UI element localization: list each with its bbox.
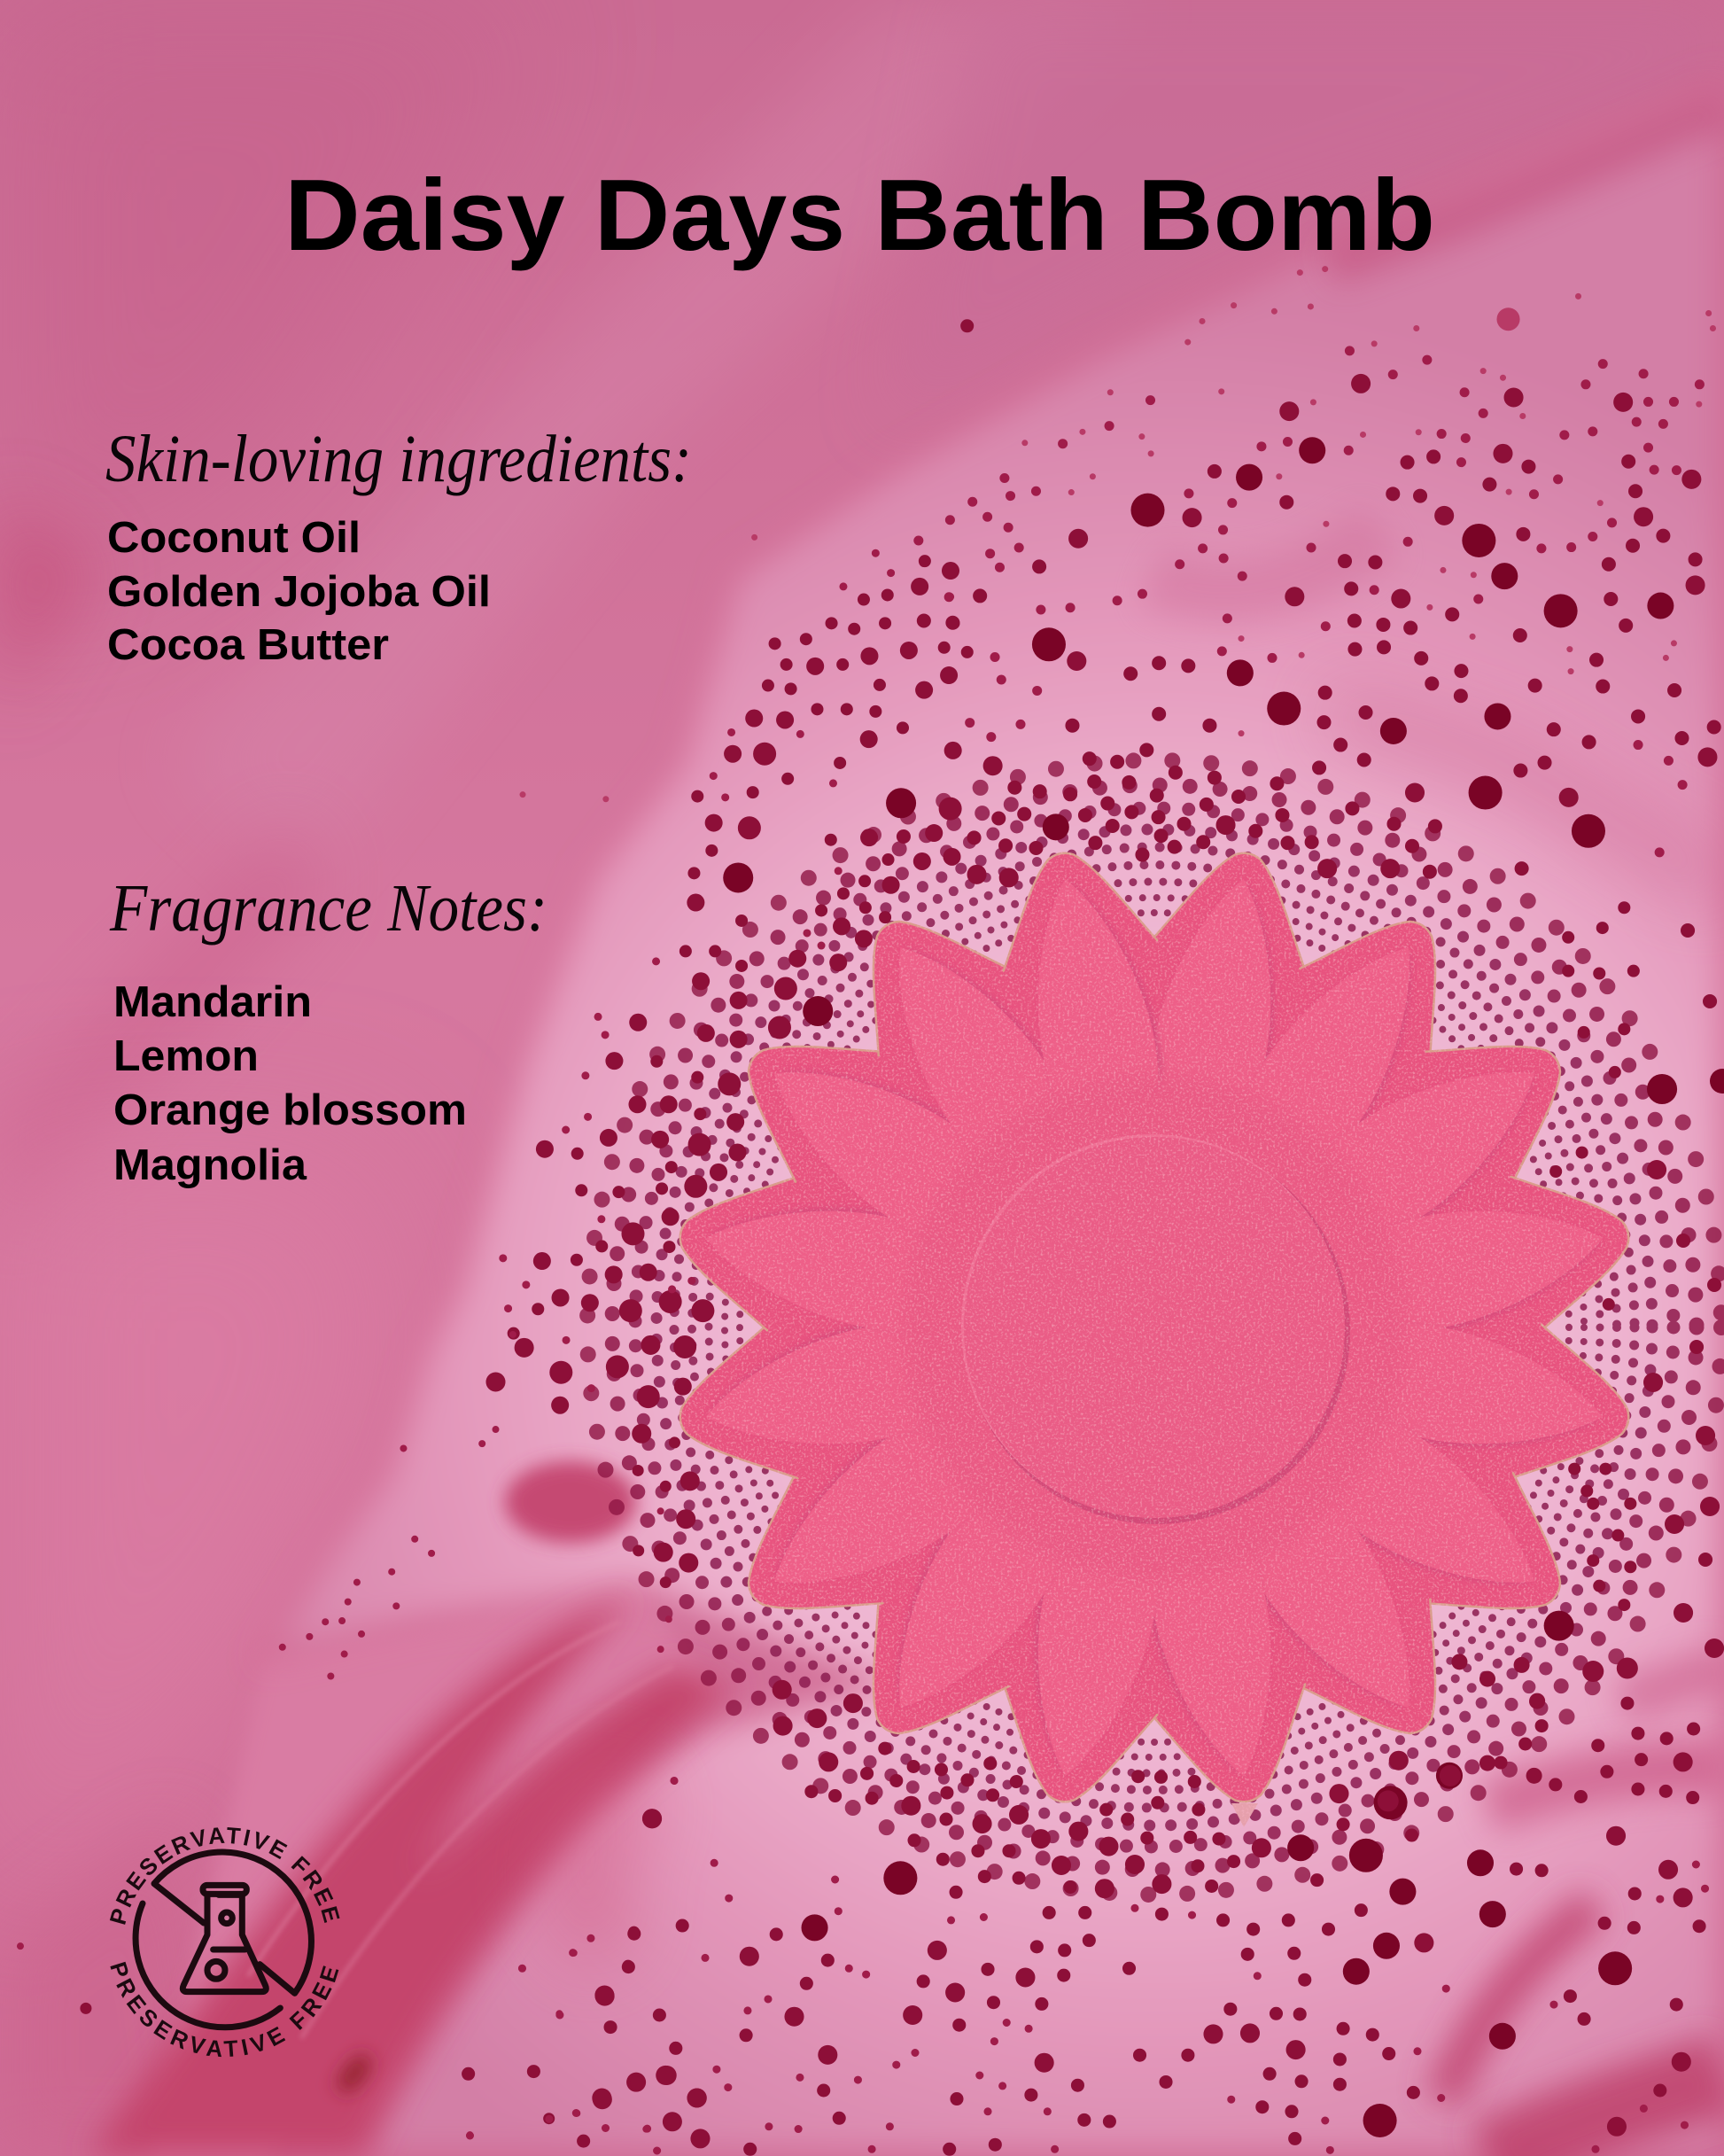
- badge arc text: PRESERVATIVE FREE: [110, 1827, 340, 1925]
- flower outline with sixteen petals: [666, 839, 1642, 1816]
- bubbles bottom: [469, 1690, 1705, 2151]
- badge: preservative free: [110, 1827, 340, 2058]
- fragrance list: Lemon: [113, 1032, 259, 1080]
- bubbles lower left: [20, 1335, 696, 2141]
- bubbles at right edge: [1653, 930, 1722, 1648]
- ingredients list: [107, 514, 491, 669]
- raised inner petals: [695, 868, 1614, 1787]
- bubbles upper right: [901, 269, 1714, 877]
- ingredients heading: Skin-loving ingredients:: [105, 422, 692, 496]
- bubbles right of flower: [1388, 907, 1634, 1801]
- bath bomb flower: [666, 839, 1642, 1827]
- icon: crossed-out flask: [136, 1852, 311, 2028]
- fragrance list: Orange blossom: [113, 1086, 467, 1134]
- tip of lower petal: [1231, 1803, 1258, 1827]
- fragrance list: Magnolia: [113, 1141, 307, 1189]
- badge arc text: [110, 1827, 340, 2058]
- ingredients list: Coconut Oil: [107, 514, 361, 562]
- fragrance list: Mandarin: [113, 978, 312, 1026]
- fragrance list: [113, 978, 467, 1189]
- ingredients list: Golden Jojoba Oil: [107, 568, 491, 616]
- flower centre disc: [961, 1134, 1350, 1524]
- bubbles left of flower: [496, 537, 967, 1405]
- title: Daisy Days Bath Bomb: [284, 160, 1435, 272]
- badge arc text: PRESERVATIVE FREE: [110, 1962, 338, 2058]
- panel: skin-loving ingredients: [105, 422, 692, 669]
- panel: fragrance notes: [109, 871, 547, 1189]
- bubbles around the flower: [587, 760, 1721, 1895]
- fragrance heading: Fragrance Notes:: [109, 871, 547, 946]
- ingredients list: Cocoa Butter: [107, 621, 389, 669]
